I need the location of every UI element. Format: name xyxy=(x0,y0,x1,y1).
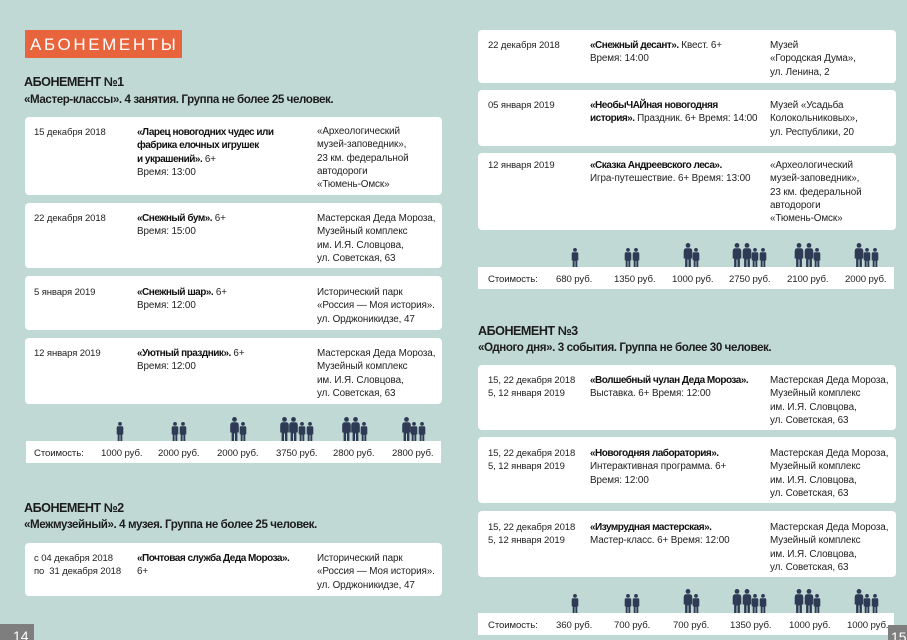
heading: subscription 1 xyxy=(24,75,333,106)
card: Ларец новогодних чудес: музей-заповедник», xyxy=(317,139,406,150)
card: Снежный десант: Время: 14:00 xyxy=(590,53,649,64)
card: Волшебный чулан: «Волшебный чулан Деда Мороза». xyxy=(590,375,748,386)
heading: subscription 3 xyxy=(478,324,771,354)
card: Изумрудная мастерская xyxy=(478,511,896,577)
card: Волшебный чулан: Выставка. 6+ Время: 12:00 xyxy=(590,388,711,399)
card: Почтовая служба: с 04 декабря 2018 xyxy=(34,553,113,564)
price strip: subscription 3: 1000 руб. xyxy=(789,620,830,631)
card: Уютный праздник: «Уютный праздник». 6+ xyxy=(137,348,244,359)
price strip: subscription 3: 700 руб. xyxy=(614,620,650,631)
card: Изумрудная мастерская: 15, 22 декабря 2018 xyxy=(488,522,575,533)
card: Снежный шар: «Снежный шар». 6+ xyxy=(137,287,227,298)
card: Снежный шар: Время: 12:00 xyxy=(137,300,196,311)
price strip: subscription 3 xyxy=(478,613,894,635)
price strip: subscription 1: 2000 руб. xyxy=(217,448,258,459)
card: Снежный шар: «Россия — Моя история». xyxy=(317,300,435,311)
card: НеобыЧАЙная новогодняя история: история». Праздник. 6+ Время: 14:00 xyxy=(590,113,757,124)
card: Снежный десант: ул. Ленина, 2 xyxy=(770,67,830,78)
price strip: subscription 3: 1000 руб. xyxy=(847,620,888,631)
icons: people groups, subscription 2 xyxy=(572,243,878,267)
price strip: subscription 3: 1350 руб. xyxy=(730,620,771,631)
card: Уютный праздник: Мастерская Деда Мороза, xyxy=(317,348,435,359)
card: Сказка Андреевского леса: «Археологический xyxy=(770,160,853,171)
title banner: АБОНЕМЕНТЫ xyxy=(30,35,178,54)
card: Снежный бум: Время: 15:00 xyxy=(137,226,196,237)
card: Сказка Андреевского леса xyxy=(478,153,896,230)
price strip: subscription 2: 2100 руб. xyxy=(787,274,828,285)
price strip: subscription 2: Стоимость: xyxy=(488,274,538,285)
card: НеобыЧАЙная новогодняя история: Колокольниковых», xyxy=(770,113,858,124)
card: Ларец новогодних чудес: «Ларец новогодних чудес или xyxy=(137,127,274,138)
card: Уютный праздник: 12 января 2019 xyxy=(34,348,101,359)
card: НеобыЧАЙная новогодняя история xyxy=(478,90,896,146)
card: Снежный шар: ул. Орджоникидзе, 47 xyxy=(317,314,415,325)
card: НеобыЧАЙная новогодняя история: «НеобыЧАЙная новогодняя xyxy=(590,100,718,111)
card: Снежный шар: Исторический парк xyxy=(317,287,403,298)
card: Снежный десант: «Снежный десант». Квест. 6+ xyxy=(590,40,722,51)
card: Сказка Андреевского леса: автодороги xyxy=(770,200,821,211)
card: Изумрудная мастерская: Мастер-класс. 6+ Время: 12:00 xyxy=(590,535,730,546)
heading: subscription 1: «Мастер-классы». 4 занятия. Группа не более 25 человек. xyxy=(24,93,333,106)
card: Новогодняя лаборатория: Музейный комплекс xyxy=(770,461,860,472)
card: Почтовая служба: «Почтовая служба Деда Мороза». xyxy=(137,553,289,564)
card: Уютный праздник: Музейный комплекс xyxy=(317,361,408,372)
heading: subscription 3: «Одного дня». 3 события. Группа не более 30 человек. xyxy=(478,341,771,354)
card: Уютный праздник: им. И.Я. Словцова, xyxy=(317,375,404,386)
card: Сказка Андреевского леса: музей-заповедник», xyxy=(770,173,859,184)
card: Новогодняя лаборатория: Мастерская Деда Мороза, xyxy=(770,448,888,459)
card: Почтовая служба: ул. Орджоникидзе, 47 xyxy=(317,580,415,591)
card: Снежный бум: ул. Советская, 63 xyxy=(317,253,395,264)
card: Почтовая служба: 6+ xyxy=(137,566,148,577)
heading: subscription 2 xyxy=(24,501,317,531)
card: Снежный бум: Музейный комплекс xyxy=(317,226,408,237)
card: Волшебный чулан: Мастерская Деда Мороза, xyxy=(770,375,888,386)
card: Снежный десант xyxy=(478,30,896,83)
card: Волшебный чулан: 15, 22 декабря 2018 xyxy=(488,375,575,386)
price strip: subscription 2 xyxy=(478,267,894,289)
card: Новогодняя лаборатория: им. И.Я. Словцова, xyxy=(770,475,857,486)
card: Снежный десант: «Городская Дума», xyxy=(770,53,856,64)
price strip: subscription 1: 2800 руб. xyxy=(333,448,374,459)
card: Снежный десант: 22 декабря 2018 xyxy=(488,40,560,51)
card: Снежный бум: «Снежный бум». 6+ xyxy=(137,213,226,224)
price strip: subscription 3: Стоимость: xyxy=(488,620,538,631)
card: Изумрудная мастерская: им. И.Я. Словцова, xyxy=(770,549,857,560)
card: Сказка Андреевского леса: 12 января 2019 xyxy=(488,160,555,171)
card: Почтовая служба: по 31 декабря 2018 xyxy=(34,566,121,577)
card: Снежный бум: Мастерская Деда Мороза, xyxy=(317,213,435,224)
card: Новогодняя лаборатория: ул. Советская, 63 xyxy=(770,488,848,499)
card: Изумрудная мастерская: Мастерская Деда Мороза, xyxy=(770,522,888,533)
card: Ларец новогодних чудес: «Археологический xyxy=(317,126,400,137)
card: Снежный шар xyxy=(25,276,442,330)
card: Почтовая служба xyxy=(25,543,442,596)
price strip: subscription 3: 360 руб. xyxy=(556,620,592,631)
card: Уютный праздник xyxy=(25,338,442,404)
card: Сказка Андреевского леса: «Сказка Андреевского леса». xyxy=(590,160,722,171)
card: Ларец новогодних чудес xyxy=(25,117,442,195)
card: Новогодняя лаборатория: 15, 22 декабря 2018 xyxy=(488,448,575,459)
price strip: subscription 1: 2800 руб. xyxy=(392,448,433,459)
card: Изумрудная мастерская: ул. Советская, 63 xyxy=(770,562,848,573)
price strip: subscription 2: 2750 руб. xyxy=(729,274,770,285)
price strip: subscription 2: 1000 руб. xyxy=(672,274,713,285)
price strip: subscription 1: 3750 руб. xyxy=(276,448,317,459)
icons: people groups, subscription 3 xyxy=(572,589,878,613)
card: НеобыЧАЙная новогодняя история: Музей «Усадьба xyxy=(770,100,843,111)
card: Снежный бум xyxy=(25,203,442,268)
heading: subscription 2: «Межмузейный». 4 музея. Группа не более 25 человек. xyxy=(24,518,317,531)
card: НеобыЧАЙная новогодняя история: ул. Республики, 20 xyxy=(770,127,854,138)
card: Уютный праздник: ул. Советская, 63 xyxy=(317,388,395,399)
card: Волшебный чулан: Музейный комплекс xyxy=(770,388,860,399)
card: Изумрудная мастерская: 5, 12 января 2019 xyxy=(488,535,565,546)
card: Новогодняя лаборатория: Время: 12:00 xyxy=(590,475,649,486)
price strip: subscription 1: 2000 руб. xyxy=(158,448,199,459)
card: Новогодняя лаборатория xyxy=(478,437,896,503)
card: Ларец новогодних чудес: 23 км. федеральной xyxy=(317,153,409,164)
card: Ларец новогодних чудес: 15 декабря 2018 xyxy=(34,127,106,138)
price strip: subscription 1: 1000 руб. xyxy=(101,448,142,459)
card: Ларец новогодних чудес: фабрика елочных игрушек xyxy=(137,140,259,151)
card: Волшебный чулан: 5, 12 января 2019 xyxy=(488,388,565,399)
card: Ларец новогодних чудес: «Тюмень-Омск» xyxy=(317,179,389,190)
card: Уютный праздник: Время: 12:00 xyxy=(137,361,196,372)
icons: people groups, subscription 1 xyxy=(116,417,426,441)
card: Снежный шар: 5 января 2019 xyxy=(34,287,95,298)
card: НеобыЧАЙная новогодняя история: 05 января 2019 xyxy=(488,100,555,111)
page number 14 xyxy=(0,624,34,640)
card: Снежный бум: им. И.Я. Словцова, xyxy=(317,240,404,251)
card: Снежный бум: 22 декабря 2018 xyxy=(34,213,106,224)
card: Снежный десант: Музей xyxy=(770,40,798,51)
price strip: subscription 2: 1350 руб. xyxy=(614,274,655,285)
card: Изумрудная мастерская: «Изумрудная мастерская». xyxy=(590,522,711,533)
card: Почтовая служба: Исторический парк xyxy=(317,553,403,564)
card: Волшебный чулан: ул. Советская, 63 xyxy=(770,415,848,426)
page number 15 xyxy=(888,625,907,640)
card: Новогодняя лаборатория: Интерактивная программа. 6+ xyxy=(590,461,726,472)
card: Новогодняя лаборатория: 5, 12 января 2019 xyxy=(488,461,565,472)
card: Почтовая служба: «Россия — Моя история». xyxy=(317,566,435,577)
card: Новогодняя лаборатория: «Новогодняя лаборатория». xyxy=(590,448,719,459)
card: Ларец новогодних чудес: и украшений». 6+ xyxy=(137,154,216,165)
card: Ларец новогодних чудес: автодороги xyxy=(317,166,368,177)
card: Сказка Андреевского леса: «Тюмень-Омск» xyxy=(770,213,842,224)
price strip: subscription 1 xyxy=(26,441,441,463)
heading: subscription 3: АБОНЕМЕНТ №3 xyxy=(478,324,578,338)
price strip: subscription 1: Стоимость: xyxy=(34,448,84,459)
price strip: subscription 2: 2000 руб. xyxy=(845,274,886,285)
card: Ларец новогодних чудес: Время: 13:00 xyxy=(137,167,196,178)
title banner xyxy=(25,30,182,58)
heading: subscription 2: АБОНЕМЕНТ №2 xyxy=(24,501,124,515)
card: Сказка Андреевского леса: Игра-путешествие. 6+ Время: 13:00 xyxy=(590,173,750,184)
heading: subscription 1: АБОНЕМЕНТ №1 xyxy=(24,75,124,89)
card: Сказка Андреевского леса: 23 км. федеральной xyxy=(770,187,862,198)
price strip: subscription 2: 680 руб. xyxy=(556,274,592,285)
card: Изумрудная мастерская: Музейный комплекс xyxy=(770,535,860,546)
price strip: subscription 3: 700 руб. xyxy=(673,620,709,631)
card: Волшебный чулан xyxy=(478,365,896,430)
card: Волшебный чулан: им. И.Я. Словцова, xyxy=(770,402,857,413)
